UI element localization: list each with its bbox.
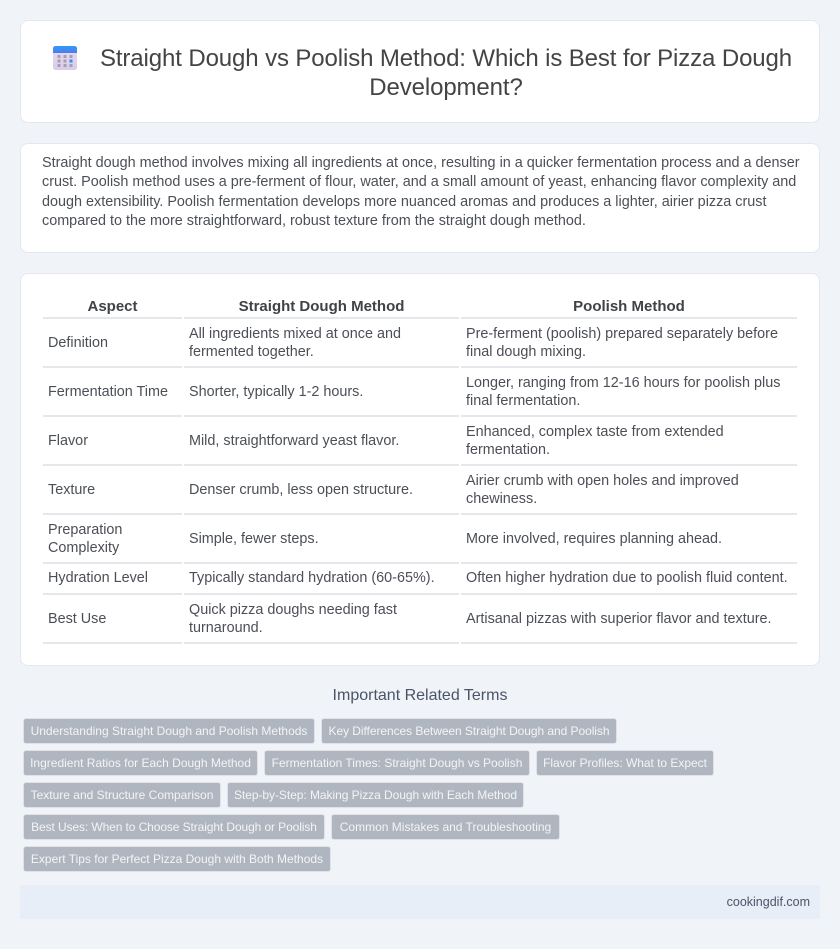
panel: introduction text: dough extensibility. Poolish fermentation develops more nuanced aromas and produces a lighter, airier pizza crust bbox=[42, 194, 766, 210]
heading: related terms: Important Related Terms bbox=[333, 687, 507, 704]
tag: Ingredient Ratios for Each Dough Method bbox=[30, 756, 251, 770]
row: best use: Quick pizza doughs needing fast bbox=[189, 602, 397, 618]
row: flavor: Enhanced, complex taste from extended bbox=[466, 424, 724, 440]
tag bbox=[331, 814, 560, 840]
tag: Expert Tips for Perfect Pizza Dough with Both Methods bbox=[31, 852, 323, 866]
row: definition: Pre-ferment (poolish) prepared separately before bbox=[466, 326, 778, 342]
row: texture: Airier crumb with open holes and improved bbox=[466, 473, 739, 489]
icon: calendar bbox=[53, 46, 77, 70]
row: texture: chewiness. bbox=[466, 491, 537, 507]
row: fermentation time bbox=[48, 375, 780, 409]
row: definition: All ingredients mixed at once and bbox=[189, 326, 401, 342]
tag: Best Uses: When to Choose Straight Dough or Poolish bbox=[31, 820, 317, 834]
panel: introduction text bbox=[20, 143, 820, 253]
tag: Key Differences Between Straight Dough and Poolish bbox=[329, 724, 609, 738]
row: hydration level: Typically standard hydration (60-65%). bbox=[189, 570, 435, 586]
table header: Straight Dough Method bbox=[239, 298, 404, 315]
row: flavor: fermentation. bbox=[466, 442, 550, 458]
tag: Fermentation Times: Straight Dough vs Poolish bbox=[272, 756, 522, 770]
tag bbox=[321, 718, 617, 744]
row: preparation complexity bbox=[48, 522, 722, 556]
row: fermentation time: Longer, ranging from 12-16 hours for poolish plus bbox=[466, 375, 780, 391]
row: fermentation time: final fermentation. bbox=[466, 393, 580, 409]
row: best use: turnaround. bbox=[189, 620, 263, 636]
tag bbox=[23, 814, 325, 840]
row: preparation complexity: Preparation bbox=[48, 522, 122, 538]
row: best use: Best Use bbox=[48, 611, 106, 627]
panel: introduction text: compared to the more straightforward, robust texture from the straight dough method. bbox=[42, 213, 586, 229]
panel: comparison table bbox=[20, 273, 820, 666]
panel: introduction text: crust. Poolish method uses a pre-ferment of flour, water, and a small amount of yeast, enhancing flavor complexity and bbox=[42, 174, 796, 190]
row: hydration level: Hydration Level bbox=[48, 570, 148, 586]
row: preparation complexity: Complexity bbox=[48, 540, 119, 556]
panel: introduction text: Straight dough method involves mixing all ingredients at once, resulting in a quicker fermentation process and a denser bbox=[42, 155, 800, 171]
row: flavor: Flavor bbox=[48, 433, 88, 449]
row: definition bbox=[48, 326, 778, 360]
tag bbox=[536, 750, 714, 776]
table header bbox=[87, 298, 685, 315]
tag bbox=[23, 718, 315, 744]
tag list: related terms bbox=[23, 718, 714, 872]
row: best use: Artisanal pizzas with superior flavor and texture. bbox=[466, 611, 772, 627]
row: definition: Definition bbox=[48, 335, 108, 351]
row: preparation complexity: More involved, requires planning ahead. bbox=[466, 531, 722, 547]
tag bbox=[23, 846, 331, 872]
tag: Flavor Profiles: What to Expect bbox=[543, 756, 707, 770]
table header: Aspect bbox=[87, 298, 138, 315]
row: hydration level bbox=[48, 570, 788, 586]
tag: Texture and Structure Comparison bbox=[31, 788, 213, 802]
row: preparation complexity: Simple, fewer steps. bbox=[189, 531, 319, 547]
footer bbox=[20, 885, 820, 919]
panel: header bbox=[20, 20, 820, 123]
row: fermentation time: Fermentation Time bbox=[48, 384, 168, 400]
row: best use bbox=[48, 602, 772, 636]
tag bbox=[227, 782, 524, 808]
row: texture: Texture bbox=[48, 482, 95, 498]
row: hydration level: Often higher hydration due to poolish fluid content. bbox=[466, 570, 788, 586]
tag: Understanding Straight Dough and Poolish Methods bbox=[31, 724, 307, 738]
row: definition: final dough mixing. bbox=[466, 344, 586, 360]
tag bbox=[264, 750, 530, 776]
source credit: cookingdif.com bbox=[727, 895, 810, 909]
row: fermentation time: Shorter, typically 1-2 hours. bbox=[189, 384, 363, 400]
title: Straight Dough vs Poolish Method: Which is Best for Pizza Dough bbox=[100, 45, 792, 72]
tag: Step-by-Step: Making Pizza Dough with Each Method bbox=[234, 788, 517, 802]
tag bbox=[23, 750, 258, 776]
tag: Common Mistakes and Troubleshooting bbox=[340, 820, 551, 834]
row: texture: Denser crumb, less open structure. bbox=[189, 482, 413, 498]
row: flavor bbox=[48, 424, 724, 458]
title: Development? bbox=[369, 74, 523, 101]
row: texture bbox=[48, 473, 739, 507]
title bbox=[100, 45, 792, 101]
table header: Poolish Method bbox=[573, 298, 685, 315]
tag bbox=[23, 782, 221, 808]
row: definition: fermented together. bbox=[189, 344, 314, 360]
row: flavor: Mild, straightforward yeast flavor. bbox=[189, 433, 399, 449]
